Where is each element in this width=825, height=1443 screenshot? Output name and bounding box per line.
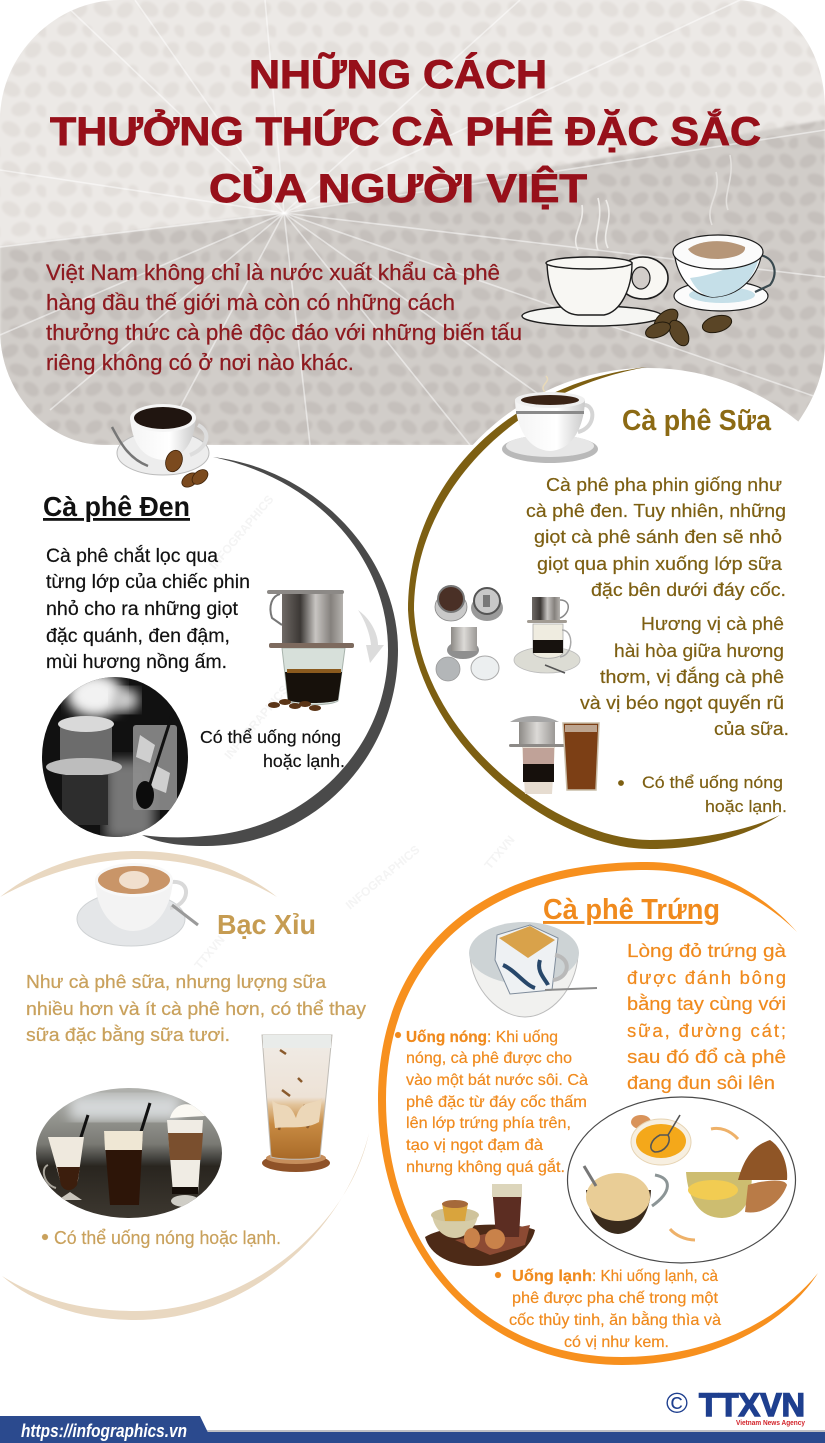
text: milk coffee description: giọt cà phê sánh đen sẽ nhỏ — [534, 526, 782, 547]
text: bac xiu description — [26, 971, 367, 1045]
watermarks: INFOGRAPHICS — [222, 682, 291, 762]
panel: black coffee crescent — [142, 457, 398, 846]
text: hot egg coffee: nhưng không quá gắt. — [406, 1157, 565, 1176]
text: hot egg coffee — [395, 1029, 588, 1176]
title — [50, 51, 761, 211]
text: milk coffee description: của sữa. — [714, 718, 789, 739]
intro text: riêng không có ở nơi nào khác. — [46, 350, 354, 375]
panel: coffee bean header background — [0, 0, 825, 450]
intro text: hàng đầu thế giới mà còn có những cách — [46, 290, 455, 315]
image: phin with iced milk coffee — [509, 716, 599, 794]
text: egg coffee description — [627, 940, 787, 1093]
text: egg coffee description: được đánh bông — [627, 967, 786, 988]
text: egg coffee description: bằng tay cùng với — [627, 993, 786, 1014]
panel: milk coffee white ellipse and crescent — [408, 367, 825, 854]
text: hot egg coffee: lên lớp trứng phía trên, — [406, 1115, 571, 1132]
logo: TTXVN: TTXVN — [699, 1387, 805, 1423]
footer bar: https://infographics.vn — [21, 1421, 187, 1441]
logo: TTXVN: Vietnam News Agency — [736, 1420, 805, 1427]
image: black and white phin photo — [40, 673, 190, 840]
title: NHỮNG CÁCH — [249, 51, 547, 97]
watermarks: INFOGRAPHICS — [427, 532, 496, 612]
text: black coffee description: Cà phê chắt lọc qua — [46, 545, 218, 567]
text: milk coffee description: giọt qua phin xuống lớp sữa — [537, 553, 783, 574]
intro text — [46, 260, 522, 375]
icon: latte cup — [77, 863, 198, 946]
watermarks: TTXVN — [192, 933, 228, 972]
image: tall iced bac xiu glass — [262, 1035, 332, 1172]
watermarks: INFOGRAPHICS — [343, 842, 422, 912]
text: cold egg coffee: có vị như kem. — [564, 1334, 669, 1351]
image: egg coffee preparation circle — [568, 1097, 796, 1263]
text: hot egg coffee: nóng, cà phê được cho — [406, 1050, 572, 1067]
icon: black coffee cup — [112, 404, 211, 490]
panel: bac xiu crescents — [0, 851, 369, 1320]
arrow: grey swoosh — [358, 610, 384, 663]
text: bac xiu description: sữa đặc bằng sữa tươi. — [26, 1024, 230, 1045]
text: black coffee note: hoặc lạnh. — [263, 751, 345, 771]
text: bac xiu description: Như cà phê sữa, nhưng lượng sữa — [26, 971, 327, 992]
text: hot egg coffee: Uống nóng — [406, 1029, 487, 1046]
logo: TTXVN — [666, 1387, 805, 1427]
text: cold egg coffee: phê được pha chế trong một — [512, 1290, 719, 1307]
bullet and note: milk coffee — [618, 773, 787, 816]
text: black coffee description: từng lớp của chiếc phin — [46, 572, 250, 593]
image: phin filter parts — [435, 586, 503, 681]
text: hot egg coffee: vào một bát nước sôi. Cà — [406, 1072, 588, 1089]
watermarks: INFOGRAPHICS — [207, 492, 276, 572]
title: THƯỞNG THỨC CÀ PHÊ ĐẶC SẮC — [50, 108, 761, 154]
text: black coffee description — [46, 545, 250, 673]
text: milk coffee description: đặc bên dưới đáy cốc. — [591, 579, 786, 600]
title: CỦA NGƯỜI VIỆT — [209, 165, 587, 211]
text: egg coffee description: Lòng đỏ trứng gà — [627, 940, 787, 961]
icon: two illustrated coffee cups with beans — [522, 155, 775, 349]
text: milk coffee description: Hương vị cà phê — [641, 613, 784, 634]
text: milk coffee description: cà phê đen. Tuy nhiên, những — [526, 500, 786, 521]
image: egg coffee set on wood tray — [425, 1184, 535, 1266]
text: milk coffee description: thơm, vị đắng cà phê — [600, 666, 784, 687]
intro text: Việt Nam không chỉ là nước xuất khẩu cà phê — [46, 260, 500, 285]
text: milk coffee description — [526, 474, 789, 739]
watermarks: INFOGRAPHICS — [602, 622, 671, 702]
bullet and note: bac xiu: Có thể uống nóng hoặc lạnh. — [54, 1228, 281, 1248]
text: milk coffee description: và vị béo ngọt quyến rũ — [580, 692, 784, 713]
heading: Cà phê Sữa: Cà phê Sữa — [622, 405, 772, 437]
image: egg coffee in bowl — [469, 922, 597, 1017]
image: phin filter over glass — [267, 590, 354, 711]
icon: milk coffee cup — [502, 376, 598, 463]
text: black coffee description: đặc quánh, đen đậm, — [46, 626, 230, 647]
text: hot egg coffee: : Khi uống — [487, 1029, 558, 1046]
image: assembled phin with milk — [514, 597, 580, 673]
text: black coffee note: Có thể uống nóng — [200, 727, 341, 747]
text: bac xiu description: nhiều hơn và ít cà phê hơn, có thể thay — [26, 998, 367, 1019]
watermarks: TTXVN — [482, 833, 518, 872]
text: egg coffee description: đang đun sôi lên — [627, 1072, 775, 1093]
panel: egg coffee crescent — [378, 862, 818, 1365]
text: egg coffee description: sữa, đường cát; — [627, 1020, 786, 1041]
image: three coffee glasses photo — [36, 1088, 222, 1218]
text: black coffee description: nhỏ cho ra những giọt — [46, 599, 239, 620]
text: milk coffee description: hài hòa giữa hương — [614, 640, 784, 661]
text: black coffee note — [200, 727, 345, 771]
heading: Cà phê Đen: Cà phê Đen — [43, 491, 190, 522]
bullet and note: milk coffee: Có thể uống nóng — [642, 773, 783, 792]
intro text: thưởng thức cà phê độc đáo với những biến tấu — [46, 320, 522, 345]
footer bar — [0, 1416, 825, 1443]
watermarks — [192, 492, 671, 972]
text: black coffee description: mùi hương nồng ấm. — [46, 652, 227, 673]
text: cold egg coffee: Uống lạnh — [512, 1268, 592, 1285]
bullet and note: milk coffee: hoặc lạnh. — [705, 797, 787, 816]
text: cold egg coffee — [495, 1268, 721, 1351]
heading: Bạc Xỉu: Bạc Xỉu — [217, 909, 316, 940]
heading: Cà phê Trứng: Cà phê Trứng — [543, 894, 720, 926]
text: hot egg coffee: phê đặc từ đáy cốc thấm — [406, 1094, 587, 1111]
text: cold egg coffee: cốc thủy tinh, ăn bằng thìa và — [509, 1310, 721, 1329]
text: egg coffee description: sau đó đổ cà phê — [627, 1046, 786, 1067]
logo: TTXVN: © — [666, 1388, 688, 1420]
text: milk coffee description: Cà phê pha phin giống như — [546, 474, 782, 495]
text: cold egg coffee: : Khi uống lạnh, cà — [592, 1268, 718, 1285]
text: hot egg coffee: tạo vị ngọt đạm đà — [406, 1137, 543, 1154]
